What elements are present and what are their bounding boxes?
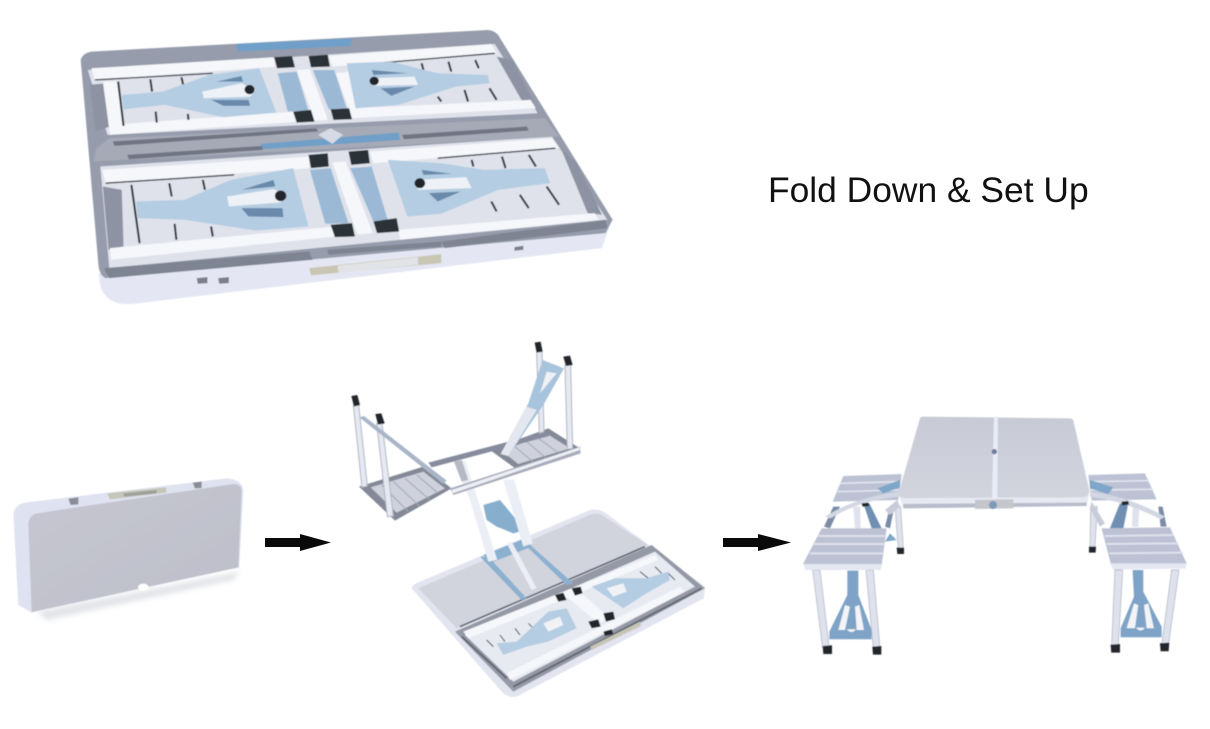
case frame	[81, 30, 613, 278]
table centre seam	[992, 417, 998, 499]
latch	[975, 499, 1013, 509]
blue centre strip	[261, 133, 400, 149]
folded blue centre	[483, 500, 525, 533]
ground shadow	[37, 572, 240, 620]
folded seat right	[592, 572, 670, 608]
photo: fully set up picnic table	[803, 417, 1187, 655]
folded seat left	[497, 608, 577, 655]
seat slats	[382, 438, 560, 512]
clasps	[197, 246, 523, 284]
lower half interior	[100, 137, 607, 268]
centre hinge	[318, 128, 343, 144]
white support arms	[454, 460, 537, 590]
latches	[68, 482, 202, 505]
title text: Fold Down & Set Up	[768, 170, 1089, 210]
centre blue struts	[278, 70, 388, 224]
table legs	[895, 507, 1097, 548]
legs	[353, 352, 573, 517]
front right seat	[1102, 527, 1187, 653]
carry handle	[309, 254, 441, 275]
blue support struts	[480, 538, 573, 600]
lock notch	[138, 584, 149, 591]
rails	[463, 555, 685, 680]
lid interior	[418, 514, 648, 628]
case body	[13, 478, 243, 613]
black blocks	[274, 55, 399, 237]
dark frame edges	[460, 547, 702, 687]
upper half interior	[88, 44, 538, 135]
table edge	[899, 494, 1089, 508]
rear left seat	[824, 474, 902, 542]
rear right seat	[1088, 473, 1167, 540]
case silhouette	[412, 510, 705, 697]
folded leg: lower right	[388, 160, 550, 216]
folded leg: upper right	[347, 62, 489, 108]
table feet	[897, 547, 1096, 554]
right blue brace	[501, 360, 564, 456]
front left seat	[803, 528, 887, 655]
photo: opened table case showing folded seats	[81, 30, 613, 304]
mechanism interior	[465, 552, 695, 682]
left seat	[359, 467, 452, 521]
photo: closed carry case	[13, 478, 243, 620]
arrow: unfolding to set up	[723, 534, 791, 551]
photo: table unfolding	[351, 342, 705, 697]
slat lines	[95, 53, 559, 243]
case face	[28, 484, 242, 612]
white rails	[91, 44, 598, 260]
left brace	[359, 416, 447, 484]
feet	[351, 342, 573, 425]
handle	[107, 487, 167, 499]
mechanism frame	[455, 545, 705, 692]
lower dark rail	[104, 220, 607, 278]
folded leg: lower left	[136, 168, 308, 230]
folded leg: upper left	[122, 68, 276, 117]
blue top clasp strip	[236, 38, 352, 52]
arrow: closed to unfolding	[265, 534, 331, 551]
centre bolt	[992, 449, 997, 454]
cross bars	[428, 432, 549, 467]
centre divider band	[93, 118, 559, 162]
table top	[899, 417, 1089, 498]
centre rails	[297, 69, 373, 235]
blocks	[555, 587, 615, 636]
side gray strips	[90, 57, 602, 250]
handle	[590, 622, 641, 650]
right seat	[490, 428, 580, 469]
case front lip	[99, 228, 609, 304]
